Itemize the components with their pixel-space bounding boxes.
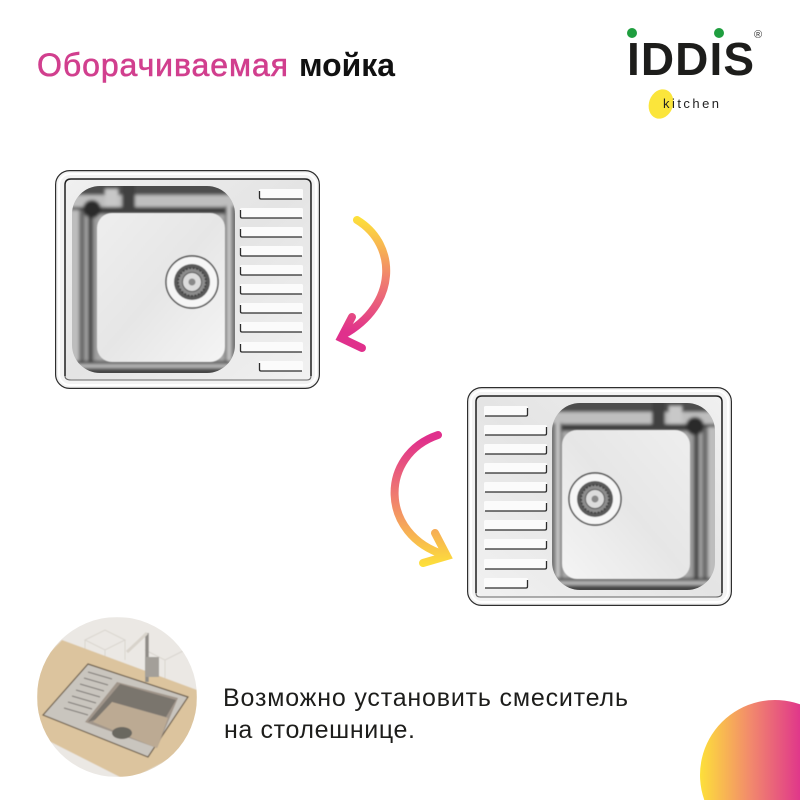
kitchen photo bbox=[37, 617, 197, 777]
logo: iDDiS kitchen: IDDIS bbox=[627, 33, 754, 85]
title: мойка bbox=[299, 47, 395, 83]
corner gradient circle bbox=[700, 700, 800, 800]
logo: iDDiS kitchen: kitchen bbox=[663, 96, 719, 111]
arrow: bottom curved bbox=[395, 435, 447, 563]
caption: Возможно установить смеситель bbox=[223, 684, 628, 712]
logo: iDDiS kitchen bbox=[627, 28, 762, 122]
title: Оборачиваемая bbox=[37, 47, 288, 83]
caption bbox=[223, 684, 628, 744]
sink top bbox=[56, 171, 319, 388]
caption: на столешнице. bbox=[224, 716, 415, 744]
arrow: top curved bbox=[341, 220, 386, 348]
logo: iDDiS kitchen: ® bbox=[754, 29, 762, 41]
sink mirrored bbox=[468, 388, 731, 605]
